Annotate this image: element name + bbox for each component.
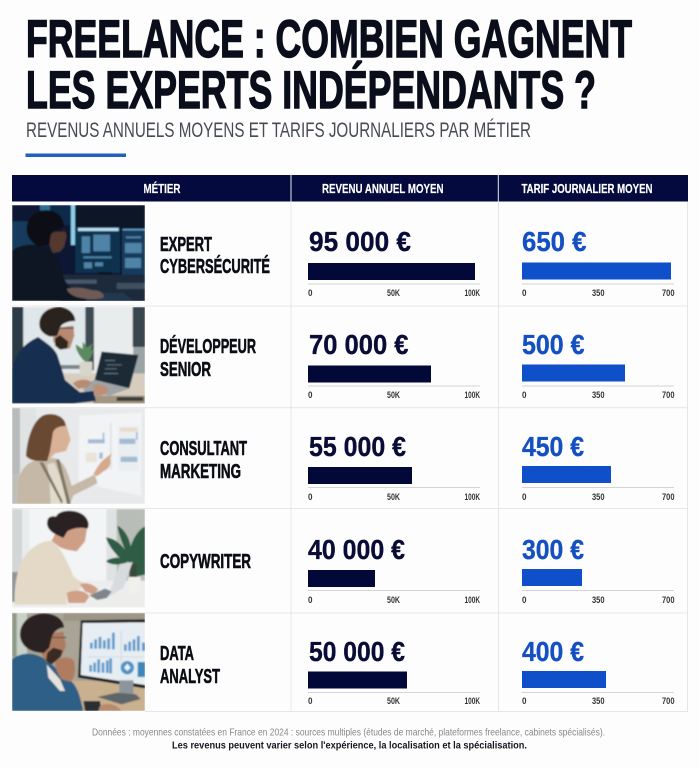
job title [160, 233, 270, 278]
annual revenue: 40 000 €: 0 [308, 595, 312, 605]
job title: DÉVELOPPEUR [160, 335, 256, 358]
job title: EXPERT [160, 233, 212, 256]
row: expert cybersécurité [12, 205, 674, 301]
daily rate: 500 €: 0 [522, 390, 526, 400]
job title [160, 437, 247, 483]
table header: TARIF JOURNALIER MOYEN [522, 181, 652, 196]
annual revenue: 70 000 €: 70 000 € [309, 329, 408, 360]
job title: ANALYST [160, 665, 220, 688]
daily rate: 450 €: 0 [522, 492, 526, 502]
annual revenue: 95 000 €: 100K [464, 288, 480, 298]
job title: COPYWRITER [160, 550, 251, 573]
daily rate: 450 € [522, 431, 674, 502]
daily rate: 300 € [522, 534, 674, 605]
title [26, 10, 632, 120]
daily rate: 500 €: 500 € [522, 329, 584, 360]
daily rate: 300 €: 0 [522, 595, 526, 605]
job title: MARKETING [160, 460, 241, 483]
table header: REVENU ANNUEL MOYEN [322, 181, 444, 196]
daily rate: 650 €: 700 [662, 288, 674, 298]
annual revenue: 40 000 €: 100K [464, 595, 480, 605]
annual revenue: 40 000 € [308, 534, 480, 605]
photo: marketing consultant at whiteboard [12, 408, 145, 504]
annual revenue: 70 000 €: 50K [387, 390, 400, 400]
annual revenue: 40 000 €: 40 000 € [308, 534, 405, 565]
annual revenue: 70 000 €: 0 [308, 390, 312, 400]
job title [160, 335, 256, 381]
daily rate: 400 €: 350 [592, 696, 604, 706]
daily rate: 500 € [522, 329, 674, 400]
accent rule [26, 154, 126, 157]
job title: CONSULTANT [160, 437, 247, 460]
job title: SENIOR [160, 358, 211, 381]
daily rate: 650 €: 0 [522, 288, 526, 298]
annual revenue: 95 000 €: 50K [387, 288, 400, 298]
daily rate: 400 €: 0 [522, 696, 526, 706]
annual revenue: 55 000 €: 100K [464, 492, 480, 502]
annual revenue: 95 000 €: 95 000 € [309, 226, 411, 257]
annual revenue: 50 000 € [308, 636, 480, 706]
daily rate: 650 € [522, 226, 674, 298]
annual revenue: 95 000 €: 0 [308, 288, 312, 298]
annual revenue: 70 000 €: 100K [464, 390, 480, 400]
table header [12, 175, 688, 202]
row: consultant marketing [12, 408, 674, 504]
job title: CYBERSÉCURITÉ [160, 255, 270, 278]
daily rate: 450 €: 450 € [522, 431, 584, 462]
row: data analyst [12, 613, 674, 711]
daily rate: 650 €: 650 € [522, 226, 586, 257]
row: développeur senior [12, 307, 674, 404]
footer note [92, 726, 605, 752]
job title: DATA [160, 642, 194, 665]
job title [160, 642, 220, 688]
daily rate: 450 €: 350 [592, 492, 604, 502]
annual revenue: 95 000 € [308, 226, 480, 298]
daily rate: 300 €: 300 € [522, 534, 584, 565]
annual revenue: 50 000 €: 0 [308, 696, 312, 706]
row: copywriter [12, 509, 674, 608]
footer note: Les revenus peuvent varier selon l'expérience, la localisation et la spécialisation. [172, 740, 527, 752]
annual revenue: 55 000 €: 0 [308, 492, 312, 502]
daily rate: 300 €: 700 [662, 595, 674, 605]
annual revenue: 70 000 € [308, 329, 480, 400]
annual revenue: 40 000 €: 50K [387, 595, 400, 605]
photo: developer at laptop [12, 307, 145, 404]
annual revenue: 50 000 €: 100K [464, 696, 480, 706]
annual revenue: 50 000 €: 50 000 € [309, 636, 405, 667]
daily rate: 400 €: 700 [662, 696, 674, 706]
daily rate: 450 €: 700 [662, 492, 674, 502]
annual revenue: 50 000 €: 50K [387, 696, 400, 706]
table header: MÉTIER [144, 181, 181, 196]
daily rate: 500 €: 700 [662, 390, 674, 400]
photo: data analyst at dashboard monitor [12, 613, 145, 711]
daily rate: 650 €: 350 [592, 288, 604, 298]
daily rate: 500 €: 350 [592, 390, 604, 400]
daily rate: 300 €: 350 [592, 595, 604, 605]
annual revenue: 55 000 € [308, 431, 480, 502]
daily rate: 400 € [522, 636, 674, 706]
daily rate: 400 €: 400 € [522, 636, 584, 667]
annual revenue: 55 000 €: 55 000 € [309, 431, 406, 462]
photo: cybersecurity expert at dark monitors [12, 205, 145, 301]
annual revenue: 55 000 €: 50K [387, 492, 400, 502]
photo: copywriter writing beside laptop [12, 509, 145, 608]
